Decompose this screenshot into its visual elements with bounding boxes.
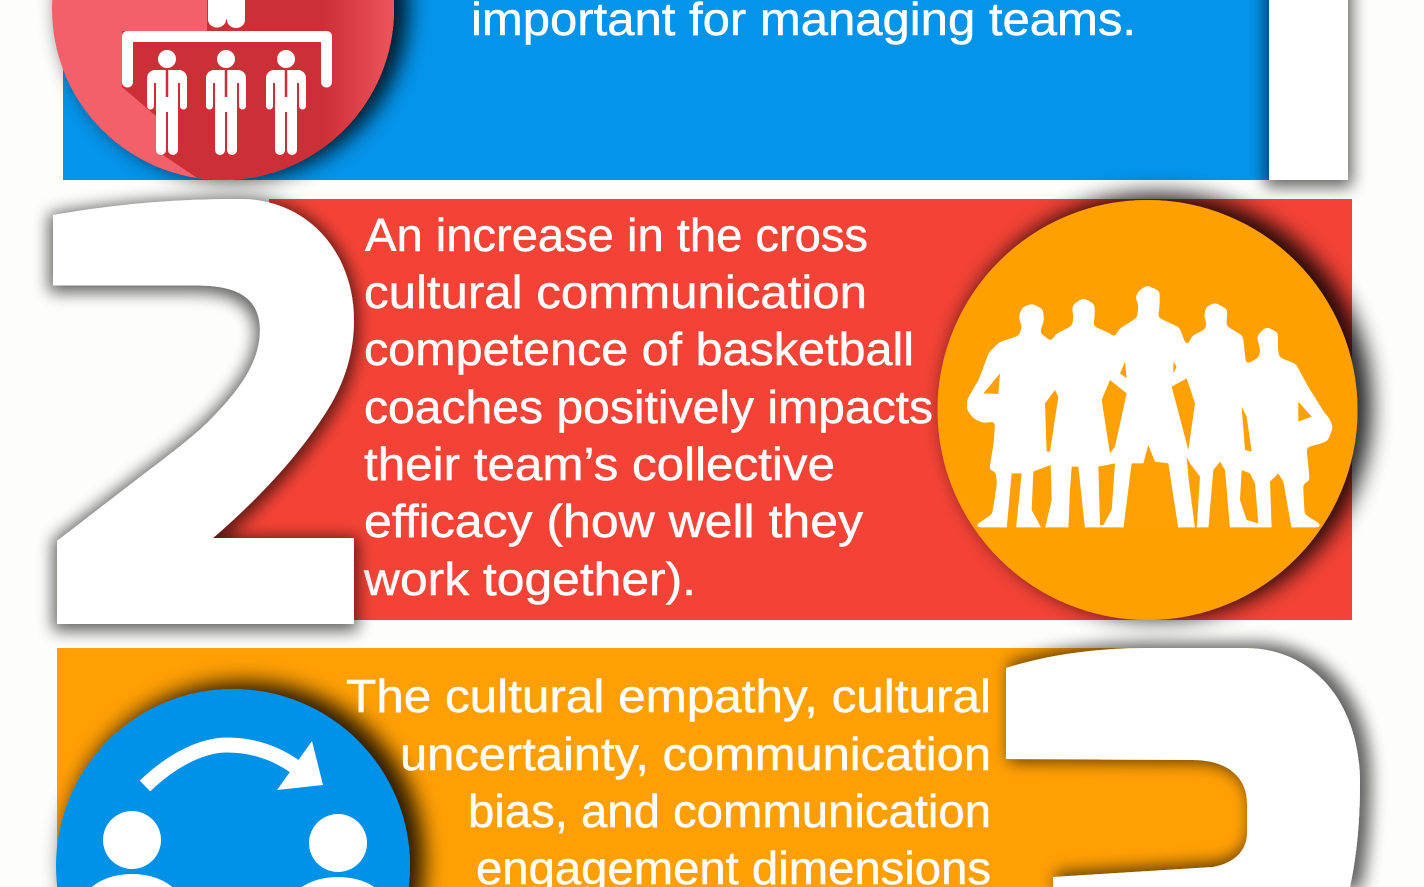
text: item 2: An increase in the cross: [365, 209, 868, 261]
text: item 2: efficacy (how well they: [364, 495, 863, 547]
orange band: [57, 648, 1252, 887]
text: item 2: competence of basketball: [364, 323, 914, 375]
panel: item 3: [56, 648, 1360, 887]
text: item 2: coaches positively impacts: [364, 381, 933, 433]
icon: communication exchange: [56, 689, 410, 887]
text: item 3: [346, 670, 991, 887]
text: item 3: bias, and communication: [468, 785, 991, 837]
text: item 2: work together).: [363, 553, 696, 605]
numeral 3: [1006, 648, 1360, 887]
blue band: [63, 0, 1269, 180]
text: item 3: The cultural empathy, cultural: [346, 670, 991, 722]
text: item 3: uncertainty, communication: [400, 728, 991, 780]
text: item 2: their team’s collective: [364, 438, 835, 490]
text: item 2: [363, 209, 933, 605]
panel: item 1: [52, 0, 1348, 180]
numeral 2: [53, 199, 354, 624]
panel: item 2: [53, 199, 1358, 624]
numeral 1 stem: [1269, 0, 1348, 180]
red band: [213, 199, 1352, 620]
text: item 2: cultural communication: [364, 266, 867, 318]
icon: team hierarchy: [52, 0, 400, 180]
icon: basketball team silhouette: [938, 200, 1358, 620]
